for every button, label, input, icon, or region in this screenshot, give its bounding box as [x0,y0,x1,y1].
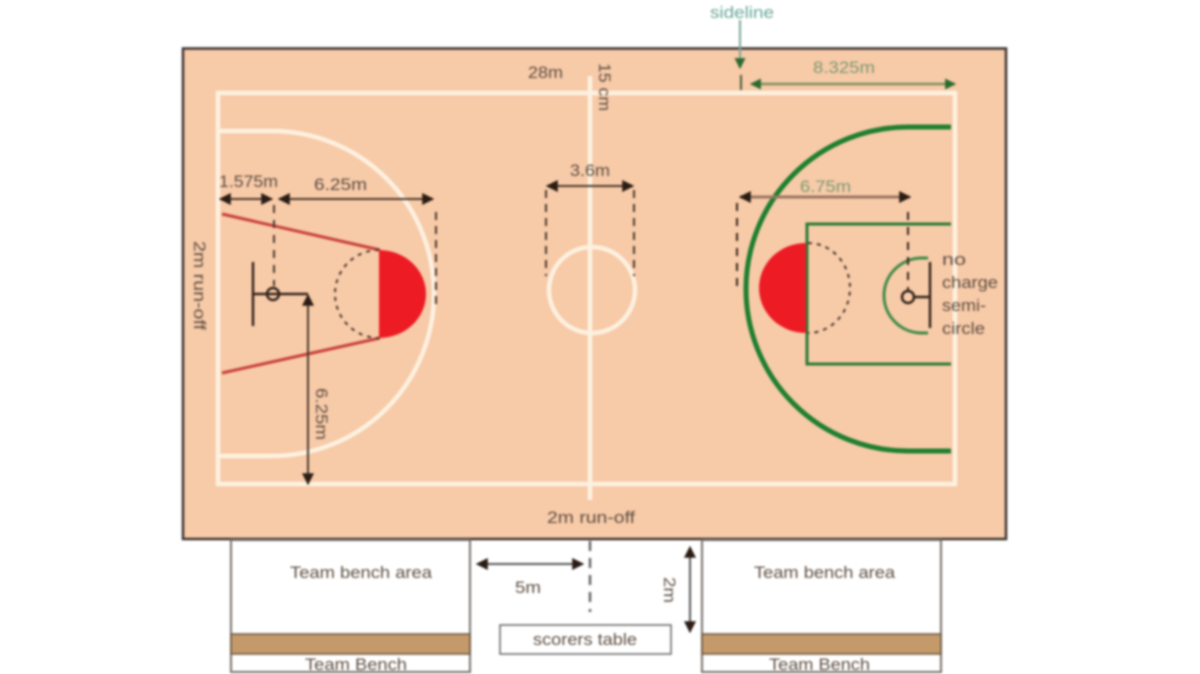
right half court [737,59,998,451]
right labels: circle [942,320,985,338]
centre labels: 15 cm [595,63,613,111]
court boundary and centre lines [218,76,955,500]
centre labels: 3.6m [570,162,610,180]
scorers area: 5m [515,579,541,597]
left dimension labels: 2m run-off [190,241,208,330]
right team bench: Team Bench [769,656,870,674]
left team bench: Team Bench [305,656,407,674]
court floor [183,48,1006,539]
right labels [800,59,998,338]
left team bench: Team bench area [290,564,433,582]
right hoop and backboard [902,262,930,328]
centre arrow and dashes [546,186,634,276]
sideline callout: sideline [710,4,774,22]
scorers area [477,541,690,654]
right red semicircle [759,243,806,333]
right team bench: Team bench area [754,564,896,582]
left team bench [231,540,470,674]
right key [807,224,951,364]
right green dimension [751,83,955,85]
centre circle [549,247,635,333]
centre dimensions [528,63,635,527]
right team bench [702,540,941,674]
left dimension labels: 6.25m [312,388,330,440]
right labels: 6.75m [800,178,851,196]
centre labels: 28m [528,64,563,82]
right labels: semi- [942,297,986,315]
left dimension labels: 6.25m [314,176,367,194]
left dotted semicircle [335,250,379,338]
centre labels [528,63,635,527]
left dimension labels [190,173,367,440]
left three-point line [218,131,434,456]
sideline callout [710,4,774,68]
right dimension lines [737,75,910,292]
left half court [190,131,436,484]
left red semicircle [379,250,426,338]
right dotted semicircle [808,243,850,333]
right labels: 8.325m [813,59,875,77]
no charge semicircle [884,258,928,333]
right three-point line [746,127,951,451]
left hoop and backboard [253,262,308,326]
centre labels: 2m run-off [547,509,635,527]
left dimension labels: 1.575m [219,173,278,191]
right labels: no [942,251,966,269]
scorers area: 2m [660,577,678,603]
scorers area: scorers table [533,631,637,649]
left key lines [222,214,380,373]
left dimension lines [220,199,436,484]
right labels: charge [942,274,998,292]
